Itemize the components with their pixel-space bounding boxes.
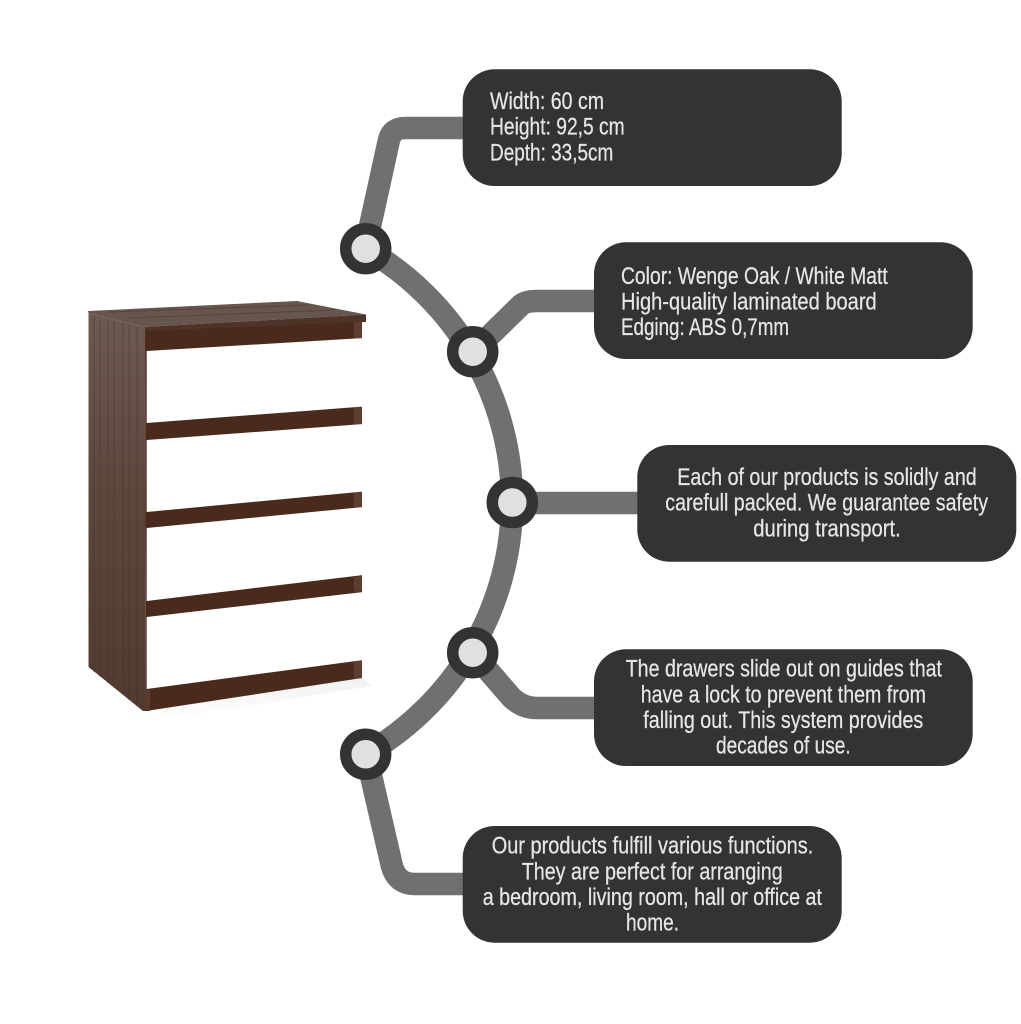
callout: dimensions: Depth: 33,5cm xyxy=(490,139,613,166)
callout: packaging xyxy=(637,445,1016,562)
callout: functions: a bedroom, living room, hall or office at xyxy=(483,884,822,911)
connector: color and material xyxy=(473,301,600,352)
connector: drawer guides xyxy=(473,653,600,708)
callout: drawer guides: falling out. This system provides xyxy=(643,707,923,734)
callout: dimensions xyxy=(463,69,842,186)
arc connecting nodes xyxy=(366,249,512,754)
connector: dimensions xyxy=(365,128,470,249)
frame leg xyxy=(145,690,150,711)
node 2 xyxy=(453,332,493,372)
callout: drawer guides xyxy=(594,649,973,766)
node 3 xyxy=(492,482,532,522)
top panel xyxy=(88,301,366,327)
floor shadow xyxy=(146,678,372,722)
callout: color and material: Color: Wenge Oak / White Matt xyxy=(621,263,888,290)
callout: color and material: Edging: ABS 0,7mm xyxy=(621,314,789,341)
connector: packaging xyxy=(512,492,645,514)
callout: color and material xyxy=(594,242,973,359)
node 4 xyxy=(453,633,493,673)
callout: functions: home. xyxy=(626,909,679,936)
side panel xyxy=(88,313,146,711)
callout: functions: Our products fulfill various functions. xyxy=(492,832,813,859)
callout: packaging: during transport. xyxy=(753,515,901,542)
callout: dimensions: Width: 60 cm xyxy=(490,88,604,115)
front frame xyxy=(145,321,362,711)
callout: functions xyxy=(463,826,842,943)
frame right edge strips xyxy=(354,322,362,679)
callout: drawer guides: decades of use. xyxy=(716,732,851,760)
top front edge xyxy=(145,314,366,331)
drawer fronts xyxy=(147,338,364,689)
callout: color and material: High-quality laminated board xyxy=(621,288,877,316)
callout: drawer guides: The drawers slide out on guides that xyxy=(626,656,942,683)
node 5 xyxy=(346,734,386,774)
connector: functions xyxy=(366,754,470,884)
callout: drawer guides: have a lock to prevent them from xyxy=(641,681,926,708)
node 1 xyxy=(346,229,386,269)
callout: functions: They are perfect for arranging xyxy=(522,858,783,885)
illustration: chest of drawers xyxy=(88,301,372,722)
callout: dimensions: Height: 92,5 cm xyxy=(490,114,625,141)
